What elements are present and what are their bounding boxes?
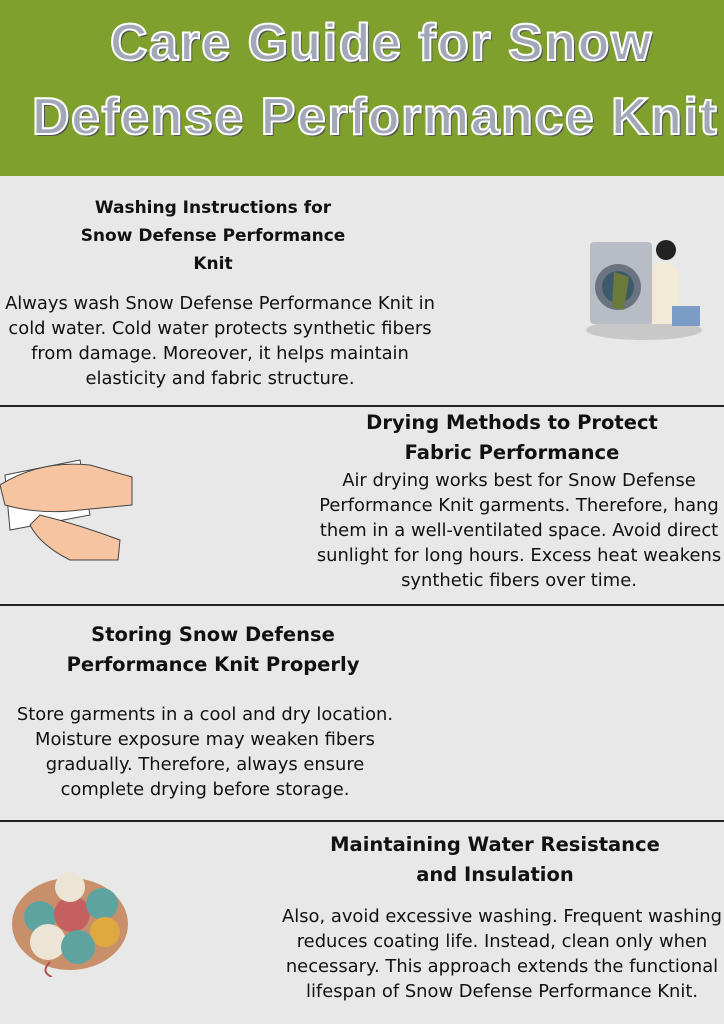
icon: washing machine with woman	[586, 240, 702, 340]
text: water resistance: lifespan of Snow Defense Performance Knit.	[306, 981, 698, 1002]
text: drying	[317, 470, 721, 591]
text: drying: Air drying works best for Snow Defense	[342, 470, 696, 491]
icon: yarn basket	[12, 872, 128, 977]
heading: water resistance	[330, 833, 660, 886]
heading: drying: Drying Methods to Protect	[366, 411, 658, 434]
text: washing: Always wash Snow Defense Performance Knit in	[5, 293, 435, 314]
heading: drying	[366, 411, 658, 464]
text: storing	[17, 704, 393, 800]
text: drying: sunlight for long hours. Excess heat weakens	[317, 545, 721, 566]
heading: water resistance: and Insulation	[416, 863, 574, 886]
heading: storing	[67, 623, 360, 676]
heading: washing	[81, 198, 345, 274]
heading: washing: Washing Instructions for	[95, 198, 331, 218]
text: water resistance: Also, avoid excessive washing. Frequent washing	[282, 906, 722, 927]
text: storing: complete drying before storage.	[61, 779, 349, 800]
text: water resistance: necessary. This approach extends the functional	[286, 956, 718, 977]
heading: storing: Storing Snow Defense	[91, 623, 335, 646]
text: water resistance: reduces coating life. Instead, clean only when	[297, 931, 707, 952]
heading: washing: Knit	[193, 254, 233, 274]
heading: storing: Performance Knit Properly	[67, 653, 359, 676]
text: washing	[5, 293, 435, 389]
text: storing: Moisture exposure may weaken fibers	[35, 729, 375, 750]
title line 1: Care Guide for Snow	[110, 14, 653, 72]
text: washing: cold water. Cold water protects synthetic fibers	[8, 318, 432, 339]
text: washing: from damage. Moreover, it helps maintain	[31, 343, 409, 364]
title line 2: Defense Performance Knit	[32, 88, 718, 146]
text: drying: synthetic fibers over time.	[401, 570, 637, 591]
text: storing: Store garments in a cool and dry location.	[17, 704, 393, 725]
heading: water resistance: Maintaining Water Resistance	[330, 833, 660, 856]
icon: hands with towel	[0, 459, 132, 560]
text: storing: gradually. Therefore, always ensure	[46, 754, 364, 775]
text: drying: Performance Knit garments. Therefore, hang	[319, 495, 719, 516]
text: drying: them in a well-ventilated space. Avoid direct	[320, 520, 718, 541]
header banner	[0, 0, 724, 176]
heading: drying: Fabric Performance	[405, 441, 619, 464]
heading: washing: Snow Defense Performance	[81, 226, 345, 246]
text: washing: elasticity and fabric structure.	[85, 368, 355, 389]
text: water resistance	[282, 906, 722, 1002]
